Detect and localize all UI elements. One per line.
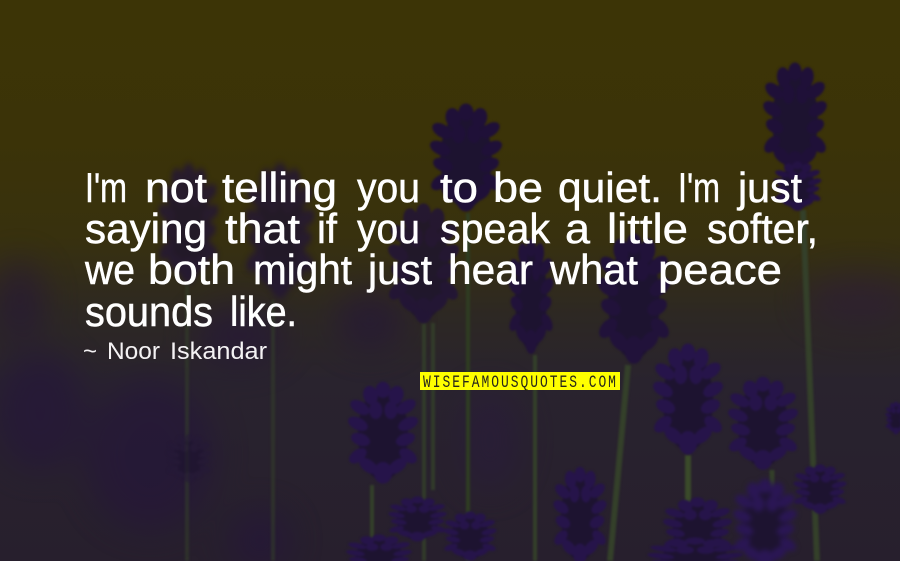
flower: bottom center left [387, 496, 448, 541]
quote text: peace [658, 246, 782, 293]
quote text: you [357, 164, 420, 211]
flower: small faded left [165, 434, 213, 482]
quote text: hear [448, 246, 533, 293]
quote text: both [148, 246, 235, 293]
author attribution: Iskandar [170, 338, 267, 365]
author attribution [83, 338, 267, 365]
flower: bottom right b [644, 537, 746, 561]
website badge: WISEFAMOUSQUOTES.COM [423, 372, 616, 393]
flower stems [187, 210, 817, 561]
author attribution: ~ [83, 338, 97, 365]
flower: lower right tall [651, 344, 725, 455]
flower: lower center [346, 382, 420, 484]
flower: left faded [243, 163, 317, 298]
flower: bottom left of center [344, 534, 414, 561]
quote text [84, 164, 818, 335]
flower: lower middle [552, 467, 608, 561]
flower: lower right second [726, 377, 800, 470]
quote text: be [493, 164, 543, 211]
flower: far left faded [156, 163, 221, 283]
quote text: we [84, 246, 135, 293]
quote text: a [565, 205, 591, 252]
quote text: like. [230, 288, 297, 335]
flower: bottom right side [792, 464, 848, 514]
quote text: if [317, 205, 337, 252]
quote text: you [357, 205, 420, 252]
author attribution: Noor [107, 338, 160, 365]
flower: bottom center [442, 511, 498, 561]
flower: bottom right blurred [731, 479, 799, 561]
quote text: sounds [85, 288, 213, 335]
quote text: I'm [85, 164, 127, 211]
flower: middle narrow [507, 238, 555, 354]
flower: top right [761, 62, 829, 175]
quote text: not [145, 164, 207, 211]
blurred background flowers [0, 260, 900, 561]
lavender flowers [156, 62, 900, 561]
quote text: little [607, 205, 688, 252]
flower: right of middle [596, 233, 672, 364]
quote text: softer, [707, 205, 818, 252]
quote text: might [253, 246, 352, 293]
quote text: just [736, 164, 802, 211]
flower: edge right [885, 402, 900, 435]
quote text: speak [440, 205, 551, 252]
flower: top right lower bud [772, 161, 823, 211]
quote text: just [366, 246, 432, 293]
quote text: telling [222, 164, 337, 211]
quote text: I'm [678, 164, 720, 211]
quote text: quiet. [558, 164, 662, 211]
quote text: what [549, 246, 638, 293]
flower: center top [428, 104, 504, 212]
flower: center left [386, 203, 461, 323]
quote text: that [225, 205, 300, 252]
flower: bottom right a [661, 497, 734, 560]
quote text: saying [85, 205, 207, 252]
quote text: to [440, 164, 478, 211]
